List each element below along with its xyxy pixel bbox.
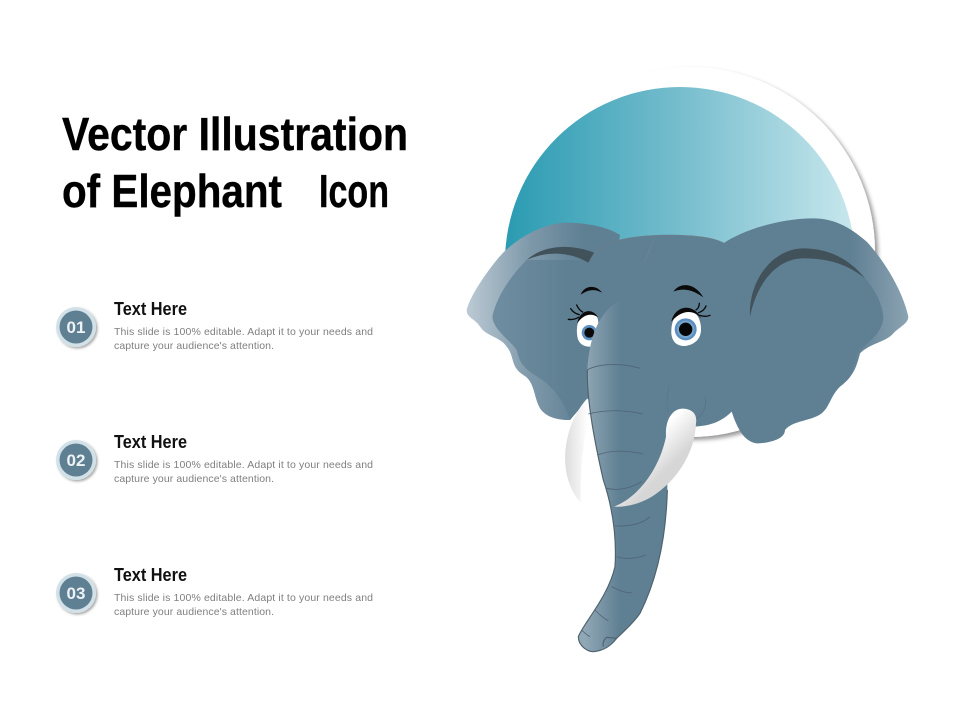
- badge 01: [56, 307, 96, 347]
- icon: left tusk: [565, 398, 591, 503]
- title: Icon: [319, 165, 389, 217]
- icon: left eye: [568, 287, 602, 347]
- badge 02: [56, 440, 96, 480]
- elephant illustration: [467, 218, 908, 652]
- text block 02: capture your audience's attention.: [114, 473, 274, 485]
- badge 03: 03: [67, 584, 85, 603]
- badge 01: 01: [67, 318, 85, 337]
- title: [62, 108, 408, 217]
- text block 01: capture your audience's attention.: [114, 340, 274, 352]
- text block 01: This slide is 100% editable. Adapt it to your needs and: [114, 326, 373, 338]
- text block 02: Text Here: [114, 432, 187, 452]
- icon: trunk: [578, 300, 667, 652]
- text block 01: Text Here: [114, 299, 187, 319]
- list item 01: [56, 299, 373, 352]
- icon: right ear: [723, 218, 908, 443]
- text block 01: [114, 299, 373, 352]
- text block 03: Text Here: [114, 565, 187, 585]
- text block 03: capture your audience's attention.: [114, 606, 274, 618]
- text block 02: This slide is 100% editable. Adapt it to your needs and: [114, 459, 373, 471]
- list item 02: [56, 432, 373, 485]
- text block 03: [114, 565, 373, 618]
- badge 02: 02: [67, 451, 85, 470]
- text block 02: [114, 432, 373, 485]
- backdrop circle: [505, 67, 875, 437]
- title: Vector Illustration: [62, 108, 408, 160]
- text block 03: This slide is 100% editable. Adapt it to your needs and: [114, 592, 373, 604]
- icon: right tusk: [614, 409, 696, 507]
- icon: head: [587, 235, 750, 427]
- icon: left ear: [467, 223, 620, 420]
- title: of Elephant: [62, 165, 282, 217]
- icon: right eye: [671, 285, 710, 346]
- badge 03: [56, 573, 96, 613]
- list item 03: [56, 565, 373, 618]
